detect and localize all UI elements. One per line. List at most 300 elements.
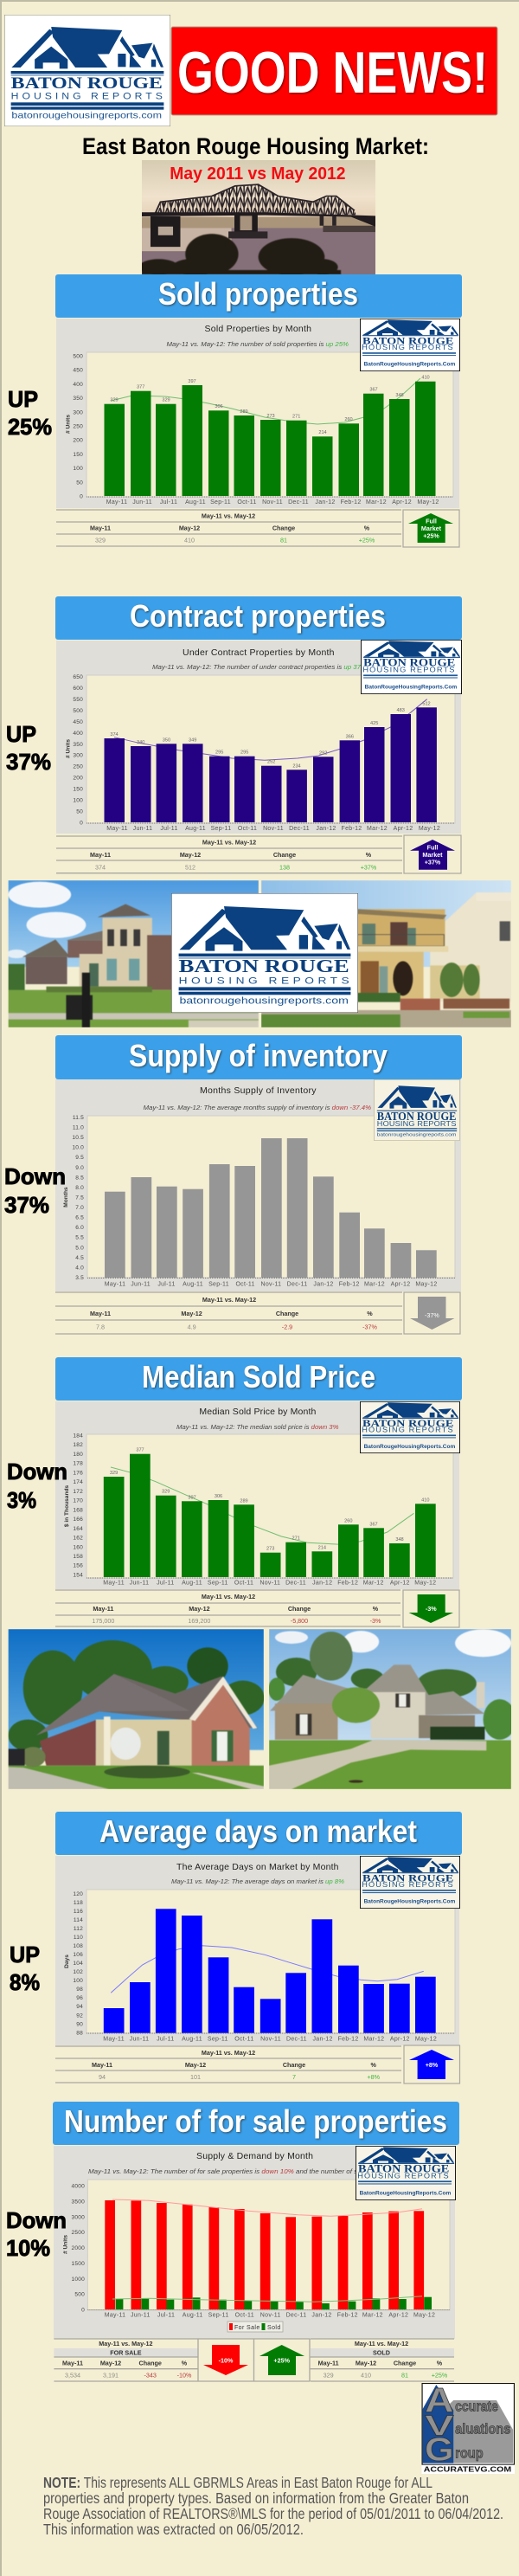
- table: sold: Change: [394, 2360, 416, 2367]
- heading: contract properties: [55, 596, 462, 640]
- comparison table: 138: [279, 864, 290, 871]
- big stat: down 3%: Down: [7, 1459, 67, 1484]
- chart: under contract properties by month: 50: [76, 808, 83, 815]
- table: for sale: -10%: [177, 2372, 192, 2379]
- big stat: down 3%: [7, 1459, 67, 1513]
- chart: average days on market by month: May-11 vs. May-12: The average days on market is up 8%: [171, 1877, 344, 1885]
- panel: contract properties: [6, 596, 462, 873]
- comparison table: May-12: [180, 851, 201, 859]
- table: for sale: [54, 2339, 198, 2381]
- heading: sold properties: [55, 274, 462, 318]
- comparison table: May-11: [90, 851, 111, 859]
- comparison table: 7.8: [96, 1323, 105, 1331]
- chart: under contract properties by month: 295: [240, 750, 248, 756]
- chart: sold properties by month: Jun-11: [132, 499, 152, 506]
- chart: months supply of inventory: Nov-11: [260, 1281, 281, 1288]
- big stat: up 37%: [6, 721, 51, 775]
- chart: average days on market by month: Days: [64, 1955, 70, 1968]
- arrow: full market +37%: Full: [427, 843, 438, 852]
- chart: under contract properties by month: Aug-11: [185, 826, 206, 832]
- chart: under contract properties by month: Mar-12: [367, 826, 388, 832]
- chart: months supply of inventory: 9.0: [75, 1165, 84, 1171]
- chart: median sold price by month: 184: [73, 1433, 83, 1439]
- photos: two homes: [9, 1629, 516, 1789]
- chart: median sold price by month: Apr-12: [390, 1581, 410, 1586]
- chart: under contract properties by month: 295: [215, 750, 223, 756]
- chart: supply and demand by month: Supply & Demand by Month: [196, 2151, 313, 2161]
- chart: months supply of inventory: Months: [63, 1187, 69, 1208]
- arrow: full market +37%: +37%: [425, 859, 441, 866]
- heading: sold properties: Sold properties: [158, 276, 358, 312]
- table: for sale: Change: [139, 2360, 162, 2367]
- chart: average days on market by month: 94: [76, 2004, 83, 2010]
- chart: months supply of inventory: 8.0: [75, 1185, 84, 1191]
- chart: months supply of inventory: Aug-11: [183, 1281, 203, 1288]
- chart: sold properties by month: May-12: [417, 499, 439, 506]
- chart: median sold price by month: 260: [344, 1518, 352, 1523]
- chart: average days on market by month: Feb-12: [338, 2036, 359, 2043]
- big stat: up 8%: 8%: [10, 1969, 40, 1995]
- comparison table: May-12: [181, 1310, 202, 1317]
- chart: median sold price by month: 166: [73, 1517, 83, 1523]
- big stat: up 25%: UP: [8, 386, 38, 412]
- logo: Accurate Valuations Group: roup: [455, 2445, 484, 2461]
- chart: median sold price by month: 158: [73, 1554, 83, 1560]
- chart: months supply of inventory: 8.5: [75, 1175, 84, 1181]
- table: sold: SOLD: [373, 2349, 390, 2356]
- chart: under contract properties by month: # Units: [66, 739, 71, 758]
- chart: average days on market by month: May-12: [415, 2036, 437, 2043]
- logo overlay: batonrougehousingreports.com: [377, 1133, 456, 1138]
- comparison table: [56, 510, 401, 546]
- chart: average days on market by month: 98: [76, 1987, 83, 1993]
- logo: Accurate Valuations Group: ccurate: [455, 2399, 498, 2414]
- table: for sale: May-11 vs. May-12: [99, 2340, 153, 2347]
- logo: Baton Rouge Housing Reports: [4, 15, 170, 126]
- chart: sold properties by month: 250: [73, 424, 83, 429]
- chart: months supply of inventory: 6.5: [75, 1215, 84, 1221]
- chart: median sold price by month: 273: [266, 1547, 274, 1552]
- chart: median sold price by month: 154: [73, 1572, 83, 1579]
- chart: supply and demand by month: 4000: [72, 2183, 85, 2190]
- photos: two homes with logo: [7, 880, 511, 1027]
- chart: supply and demand by month: Feb-12: [337, 2313, 358, 2318]
- logo overlay: [360, 1401, 460, 1453]
- chart: supply and demand by month: 1000: [72, 2277, 85, 2283]
- chart: under contract properties by month: 300: [73, 753, 83, 759]
- chart: under contract properties by month: Apr-12: [394, 826, 413, 832]
- comparison table: [55, 1590, 400, 1626]
- chart: median sold price by month: [55, 1401, 459, 1589]
- logo: Accurate Valuations Group: [422, 2381, 515, 2474]
- arrow: -37%: [404, 1292, 460, 1334]
- logo overlay: [374, 1079, 460, 1141]
- chart: sold properties by month: 329: [162, 398, 170, 403]
- chart: months supply of inventory: 11.0: [73, 1125, 84, 1131]
- chart: average days on market by month: 108: [73, 1943, 83, 1949]
- comparison table: %: [364, 525, 370, 531]
- chart: supply and demand by month: Mar-12: [362, 2313, 383, 2318]
- panel: number of for sale properties: [6, 2102, 459, 2381]
- comparison table: May-11: [90, 525, 111, 531]
- chart: under contract properties by month: May-12: [419, 826, 440, 832]
- chart: supply and demand by month: May-11: [105, 2313, 125, 2318]
- chart: under contract properties by month: 350: [163, 737, 170, 743]
- logo: Baton Rouge Housing Reports: HOUSING REPORTS: [179, 976, 349, 986]
- big stat: down 3%: 3%: [7, 1487, 36, 1513]
- chart: supply and demand by month: 2500: [72, 2230, 85, 2236]
- banner: Good News: [171, 27, 497, 115]
- chart: median sold price by month: 377: [136, 1448, 144, 1453]
- chart: median sold price by month: Mar-12: [363, 1581, 384, 1586]
- chart: sold properties by month: Mar-12: [366, 499, 387, 506]
- chart: median sold price by month: Dec-11: [285, 1581, 306, 1586]
- chart: months supply of inventory: Jan-12: [313, 1281, 334, 1288]
- table: sold: May-12: [356, 2360, 376, 2367]
- chart: sold properties by month: Aug-11: [185, 499, 206, 506]
- chart: sold properties by month: 500: [73, 353, 83, 360]
- comparison table: Change: [276, 1310, 298, 1317]
- logo overlay: [360, 1856, 460, 1909]
- chart: supply and demand by month: Apr-12: [388, 2313, 408, 2318]
- chart: sold properties by month: Sold Properties by Month: [204, 324, 311, 334]
- chart: under contract properties by month: Jul-11: [160, 826, 178, 832]
- chart: median sold price by month: 397: [188, 1495, 196, 1500]
- logo overlay: BATON ROUGE: [363, 656, 456, 668]
- big stat: up 25%: 25%: [8, 414, 52, 440]
- comparison table: May-11 vs. May-12: [202, 512, 255, 519]
- chart: median sold price by month: 180: [73, 1452, 83, 1458]
- chart: months supply of inventory: Jun-11: [131, 1281, 151, 1288]
- chart: months supply of inventory: Dec-11: [287, 1281, 308, 1288]
- chart: sold properties by month: 273: [266, 414, 275, 419]
- note text: [43, 2474, 503, 2538]
- chart: median sold price by month: 410: [421, 1497, 429, 1503]
- chart: sold properties by month: 271: [292, 414, 300, 419]
- chart: sold properties by month: Dec-11: [288, 499, 309, 506]
- table: sold: May-11: [318, 2360, 339, 2367]
- chart: median sold price by month: May-11 vs. May-12: The median sold price is down 3%: [176, 1423, 339, 1431]
- chart: average days on market by month: May-11: [103, 2036, 125, 2043]
- chart: median sold price by month: 306: [215, 1494, 222, 1499]
- arrow: full market +25%: Full: [426, 518, 437, 525]
- chart: under contract properties by month: 340: [137, 740, 144, 745]
- chart: months supply of inventory: 7.5: [75, 1195, 84, 1201]
- logo: Baton Rouge Housing Reports: batonrougehousingreports.com: [11, 111, 162, 120]
- chart: supply and demand by month: 3500: [72, 2199, 85, 2205]
- chart: supply and demand by month: Jan-12: [311, 2313, 332, 2318]
- chart: median sold price by month: 156: [73, 1563, 83, 1569]
- image: Mississippi river bridge: May 2011 vs May 2012: [170, 164, 345, 184]
- logo overlay: [361, 640, 462, 694]
- chart: months supply of inventory: May-11 vs. May-12: The average months supply of inventory is down -37.4%: [144, 1104, 371, 1111]
- chart: under contract properties by month: [56, 641, 461, 834]
- big stat: down 37%: 37%: [4, 1192, 49, 1218]
- chart: median sold price by month: Jan-12: [312, 1581, 332, 1586]
- chart: average days on market by month: 102: [73, 1969, 83, 1975]
- heading: supply of inventory: Supply of inventory: [129, 1038, 388, 1073]
- comparison table: -37%: [362, 1323, 377, 1331]
- chart: average days on market by month: 110: [74, 1935, 83, 1941]
- chart: under contract properties by month: 252: [267, 760, 275, 765]
- chart: sold properties by month: 150: [73, 452, 83, 458]
- chart: sold properties by month: 0: [80, 493, 83, 500]
- logo overlay: BATON ROUGE: [362, 335, 453, 346]
- chart: sold properties by month: Nov-11: [262, 499, 283, 506]
- chart: average days on market by month: Oct-11: [234, 2036, 254, 2043]
- big stat: up 25%: [8, 386, 52, 440]
- comparison table: %: [366, 851, 372, 859]
- chart: sold properties by month: 397: [188, 379, 196, 384]
- chart: average days on market by month: Dec-11: [286, 2036, 307, 2043]
- chart: average days on market by month: 104: [73, 1961, 83, 1967]
- chart: median sold price by month: Sep-11: [208, 1581, 228, 1586]
- chart: under contract properties by month: 483: [397, 708, 405, 713]
- chart: median sold price by month: $ in Thousands: [64, 1484, 70, 1527]
- chart: sold properties by month: # Units: [66, 415, 71, 434]
- comparison table: May-11 vs. May-12: [202, 1593, 255, 1600]
- chart: under contract properties by month: Dec-11: [289, 826, 310, 832]
- chart: supply and demand by month: May-11 vs. May-12: The number of for sale properties is down 10% and the number of sold properties is up 25%: [88, 2167, 432, 2175]
- chart: sold properties by month: 450: [73, 368, 83, 374]
- chart: sold properties by month: 410: [421, 376, 430, 381]
- photo: two-story galleried home: [261, 880, 511, 1027]
- chart: under contract properties by month: 650: [73, 674, 83, 680]
- logo overlay: [356, 2146, 456, 2200]
- chart: months supply of inventory: 4.0: [75, 1265, 84, 1271]
- chart: under contract properties by month: May-11: [106, 826, 128, 832]
- chart: average days on market by month: Jan-12: [312, 2036, 333, 2043]
- chart: months supply of inventory: May-12: [415, 1281, 438, 1288]
- big stat: down 37%: Down: [4, 1163, 66, 1189]
- photo: brick and stucco home: [9, 880, 259, 1027]
- chart: supply and demand by month: Jun-11: [131, 2313, 151, 2318]
- chart: median sold price by month: 160: [73, 1544, 83, 1550]
- chart: average days on market by month: 90: [76, 2021, 83, 2027]
- chart: average days on market by month: 120: [73, 1891, 83, 1897]
- chart: average days on market by month: Apr-12: [390, 2036, 410, 2043]
- comparison table: May-11 vs. May-12: [202, 838, 256, 847]
- comparison table: %: [367, 1310, 373, 1317]
- chart: months supply of inventory: 9.5: [75, 1155, 84, 1161]
- chart: months supply of inventory: [55, 1079, 461, 1291]
- logo overlay: HOUSING REPORTS: [362, 666, 455, 673]
- table: sold: 329: [324, 2372, 334, 2379]
- logo: Baton Rouge Housing Reports: HOUSING REPORTS: [11, 92, 163, 101]
- chart: average days on market by month: 114: [74, 1917, 83, 1923]
- chart: sold properties by month: 200: [73, 438, 83, 444]
- logo: Baton Rouge Housing Reports: BATON ROUGE: [179, 956, 349, 976]
- chart: months supply of inventory: 7.0: [75, 1205, 84, 1211]
- chart: sold properties by month: Jul-11: [160, 499, 177, 506]
- chart: under contract properties by month: Jun-11: [133, 826, 152, 832]
- logo overlay: HOUSING REPORTS: [362, 344, 453, 351]
- chart: months supply of inventory: 10.0: [72, 1145, 84, 1151]
- logo overlay: BATON ROUGE: [358, 2162, 450, 2174]
- chart: sold properties by month: Apr-12: [392, 499, 412, 506]
- chart: supply and demand by month: Sep-11: [208, 2313, 229, 2318]
- arrow: +8%: +8%: [426, 2061, 439, 2069]
- comparison table: 329: [95, 537, 106, 544]
- comparison table: -2.9: [282, 1323, 292, 1331]
- arrows: for sale -10% and sold +25%: +25%: [273, 2356, 291, 2365]
- comparison table: Change: [283, 2061, 305, 2069]
- chart: under contract properties by month: Under Contract Properties by Month: [183, 647, 335, 658]
- chart: median sold price by month: May-12: [414, 1581, 436, 1586]
- chart: supply and demand by month: 3000: [72, 2214, 85, 2220]
- chart: average days on market by month: The Average Days on Market by Month: [176, 1862, 339, 1872]
- logo: Accurate Valuations Group: ACCURATEVG.COM: [424, 2465, 511, 2474]
- heading: number of for sale properties: Number of for sale properties: [64, 2103, 447, 2139]
- chart: median sold price by month: 174: [73, 1479, 83, 1485]
- chart: average days on market by month: Nov-11: [260, 2036, 281, 2043]
- chart: under contract properties by month: 550: [73, 697, 83, 703]
- logo overlay: HOUSING REPORTS: [357, 2172, 449, 2180]
- comparison table: Change: [288, 1605, 311, 1613]
- comparison table: 410: [184, 537, 195, 544]
- comparison table: +25%: [359, 537, 375, 544]
- table: sold: +25%: [432, 2372, 448, 2379]
- comparison table: 4.9: [188, 1323, 196, 1331]
- chart: months supply of inventory: 6.0: [75, 1225, 84, 1231]
- chart: months supply of inventory: 5.0: [75, 1245, 84, 1251]
- chart: under contract properties by month: 250: [73, 764, 83, 770]
- chart: under contract properties by month: 150: [73, 786, 83, 793]
- comparison table: May-11 vs. May-12: [202, 2049, 255, 2057]
- chart: median sold price by month: 162: [73, 1536, 83, 1541]
- table: for sale: FOR SALE: [110, 2349, 142, 2356]
- comparison table: %: [373, 1605, 379, 1613]
- comparison table: [56, 836, 402, 873]
- table: for sale: May-12: [100, 2360, 121, 2367]
- chart: sold properties by month: 377: [137, 384, 144, 390]
- chart: average days on market by month: 92: [76, 2012, 83, 2019]
- chart: sold properties by month: 306: [215, 404, 223, 409]
- big stat: up 37%: UP: [6, 721, 36, 747]
- chart: months supply of inventory: May-11: [105, 1281, 125, 1288]
- panel: median sold price: [7, 1357, 462, 1627]
- arrow: full market +25%: +25%: [423, 531, 439, 540]
- table: sold: 81: [401, 2372, 408, 2379]
- heading: median sold price: Median Sold Price: [142, 1359, 375, 1394]
- chart: supply and demand by month: 2000: [72, 2245, 85, 2251]
- chart: median sold price by month: Median Sold Price by Month: [199, 1407, 317, 1417]
- comparison table: May-11 vs. May-12: [202, 1296, 256, 1304]
- chart: supply and demand by month: [54, 2146, 455, 2339]
- big stat: down 37%: [4, 1163, 66, 1218]
- chart: sold properties by month: 367: [369, 388, 378, 393]
- panel: average days on market: [10, 1812, 462, 2083]
- chart: months supply of inventory: 10.5: [72, 1135, 84, 1141]
- chart: under contract properties by month: 374: [110, 732, 119, 737]
- chart: sold properties by month: 329: [110, 398, 119, 403]
- comparison table: 94: [99, 2073, 106, 2081]
- chart: under contract properties by month: 234: [292, 763, 301, 769]
- arrow: -3%: -3%: [426, 1605, 437, 1613]
- chart: supply and demand by month: Nov-11: [260, 2313, 281, 2318]
- chart: median sold price by month: 176: [73, 1470, 83, 1476]
- chart: months supply of inventory: 3.5: [75, 1275, 84, 1281]
- comparison table: May-11: [90, 1310, 111, 1317]
- chart: median sold price by month: 182: [73, 1442, 83, 1448]
- chart: median sold price by month: Jul-11: [157, 1581, 174, 1586]
- chart: median sold price by month: 329: [162, 1490, 170, 1495]
- logo overlay: BATON ROUGE: [362, 1418, 453, 1429]
- comparison table: 512: [185, 864, 195, 871]
- chart: under contract properties by month: 425: [370, 721, 378, 726]
- comparison table: Change: [273, 851, 296, 859]
- comparison table: Change: [272, 525, 295, 531]
- chart: under contract properties by month: 500: [73, 708, 83, 714]
- chart: sold properties by month: 100: [73, 466, 83, 472]
- chart: under contract properties by month: Sep-11: [211, 826, 231, 832]
- comparison table: May-12: [189, 1605, 210, 1613]
- chart: average days on market by month: Mar-12: [363, 2036, 384, 2043]
- big stat: up 37%: 37%: [6, 749, 51, 775]
- chart: supply and demand by month: 1500: [72, 2261, 85, 2267]
- table: sold: %: [437, 2360, 443, 2367]
- chart: under contract properties by month: 400: [73, 731, 83, 737]
- chart: average days on market by month: 106: [73, 1952, 83, 1958]
- chart: sold properties by month: [56, 319, 459, 508]
- chart: median sold price by month: Feb-12: [337, 1581, 358, 1586]
- chart: sold properties by month: 350: [73, 396, 83, 402]
- chart: supply and demand by month: 500: [74, 2292, 85, 2298]
- comparison table: May-11: [93, 1605, 113, 1613]
- chart: median sold price by month: 289: [240, 1498, 248, 1504]
- comparison table: %: [370, 2061, 376, 2069]
- legend: Sold: [267, 2325, 281, 2331]
- note text: NOTE: This represents ALL GBRMLS Areas in East Baton Rouge for ALL: [43, 2474, 432, 2491]
- chart: under contract properties by month: Feb-12: [342, 826, 362, 832]
- chart: supply and demand by month: Jul-11: [157, 2313, 175, 2318]
- logo: Baton Rouge Housing Reports: batonrougehousingreports.com: [179, 995, 349, 1006]
- logo overlay: HOUSING REPORTS: [377, 1119, 457, 1128]
- chart: months supply of inventory: Mar-12: [364, 1281, 385, 1288]
- comparison table: 7: [292, 2073, 296, 2081]
- chart: median sold price by month: 172: [73, 1489, 83, 1495]
- logo overlay: [360, 319, 460, 371]
- chart: sold properties by month: 214: [318, 430, 327, 435]
- chart: supply and demand by month: May-12: [413, 2313, 435, 2318]
- big stat: down 10%: [6, 2207, 67, 2261]
- chart: sold properties by month: 348: [395, 393, 404, 398]
- chart: sold properties by month: 260: [344, 417, 353, 422]
- logo: Baton Rouge Housing Reports: [171, 893, 358, 1013]
- image: Mississippi river bridge: [142, 160, 375, 274]
- comparison table: 81: [280, 537, 287, 544]
- table: for sale: 3,191: [103, 2372, 119, 2379]
- chart: supply and demand by month: 0: [81, 2308, 85, 2313]
- table: for sale: %: [182, 2360, 188, 2367]
- logo: Accurate Valuations Group: V: [425, 2410, 454, 2442]
- legend: [227, 2322, 283, 2332]
- chart: median sold price by month: 367: [369, 1522, 378, 1527]
- comparison table: 169,200: [188, 1617, 210, 1625]
- chart: average days on market by month: Aug-11: [182, 2036, 202, 2043]
- chart: under contract properties by month: May-11 vs. May-12: The number of under contract properties is up 37%: [152, 663, 367, 671]
- chart: supply and demand by month: Aug-11: [183, 2313, 203, 2318]
- comparison table: +37%: [361, 864, 377, 871]
- chart: under contract properties by month: 600: [73, 686, 83, 692]
- arrow: full market +37%: [404, 835, 461, 873]
- chart: sold properties by month: Feb-12: [341, 499, 362, 506]
- photo: large home with driveway: [269, 1629, 511, 1789]
- chart: average days on market by month: 118: [74, 1900, 83, 1906]
- arrows: for sale -10% and sold +25%: [198, 2339, 310, 2381]
- chart: sold properties by month: 289: [240, 409, 248, 415]
- chart: months supply of inventory: Sep-11: [208, 1281, 229, 1288]
